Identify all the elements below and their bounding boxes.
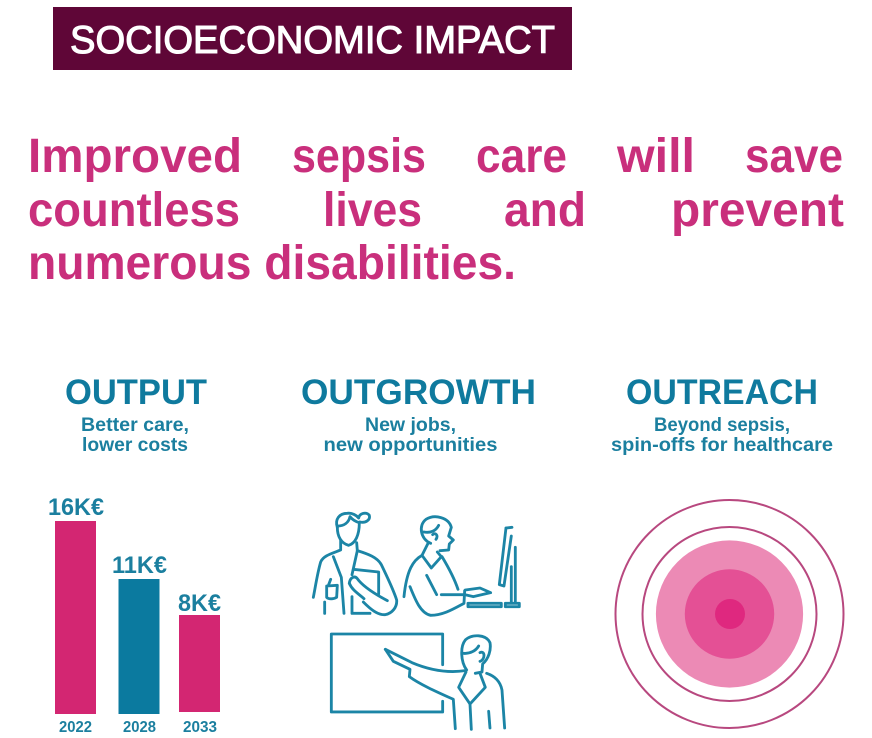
concentric circles: outreach ripple [616,500,844,728]
headline [28,129,844,290]
bar 2028 [112,552,167,736]
bar 2022: 16K€ [48,494,104,521]
column: output heading [65,373,207,456]
bar 2033: 8K€ [178,590,221,617]
bar 2022: 2022 [59,719,92,736]
column: output heading: lower costs [82,434,188,456]
column: outgrowth heading: OUTGROWTH [301,373,536,412]
headline: sepsis [292,129,426,183]
headline: and [504,183,586,237]
headline: lives [323,183,422,237]
headline: Improved [28,129,242,183]
column: outreach heading: Beyond sepsis, [654,414,790,436]
icon: presenter at board [331,634,505,729]
headline: care [476,129,567,183]
headline: save [745,129,843,183]
column: outgrowth heading: New jobs, [365,414,456,436]
headline: prevent [671,183,844,237]
column: outgrowth heading [301,373,536,456]
column: output heading: OUTPUT [65,373,207,412]
column: outreach heading [611,373,833,456]
icon: man at computer [404,517,519,615]
column: outreach heading: spin-offs for healthcare [611,434,833,456]
icon: professionals at work [313,513,519,729]
section title banner: SOCIOECONOMIC IMPACT [70,19,555,62]
column: output heading: Better care, [81,414,189,436]
icon: woman with clipboard [313,513,397,615]
bar 2028: 2028 [123,719,156,736]
column: outreach heading: OUTREACH [626,373,818,412]
bar chart: cost by year [48,494,221,736]
headline: will [616,129,695,183]
bar 2033 [178,590,221,736]
headline: countless [28,183,240,237]
column: outgrowth heading: new opportunities [324,434,498,456]
bar 2033: 2033 [183,719,217,736]
bar 2028: 11K€ [112,552,167,579]
section title banner [53,7,572,70]
bar 2022 [48,494,104,736]
headline: numerous disabilities. [28,236,516,290]
